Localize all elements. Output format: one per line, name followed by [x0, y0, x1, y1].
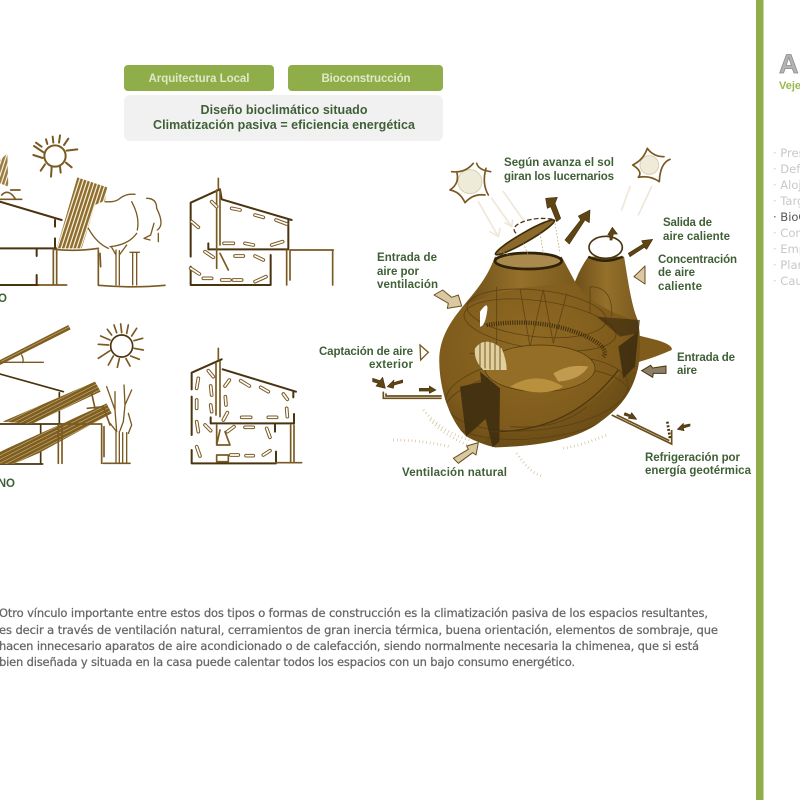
label: ventilation intake: ventilación — [377, 279, 438, 291]
rotating skylight lid — [493, 216, 562, 269]
right cone — [575, 257, 638, 322]
right cupola — [588, 236, 623, 261]
dome body — [439, 257, 640, 447]
icon: summer sun — [33, 135, 77, 177]
spiral stair — [487, 323, 605, 357]
button: Bioconstrucción — [288, 65, 443, 91]
label: ventilation intake: Entrada de — [377, 252, 437, 264]
intake pipe with arrows — [373, 377, 442, 398]
geothermal pipe with arrows — [612, 413, 690, 444]
arrow: natural ventilation — [453, 443, 478, 463]
label: air inlet: aire — [677, 365, 697, 377]
marker: hot air concentration — [634, 266, 645, 284]
structural rings — [445, 286, 630, 440]
sun ray arrows — [478, 187, 652, 237]
label: hot air concentration: Concentración — [658, 254, 737, 266]
sidebar logo — [779, 49, 800, 92]
arrow: air inlet — [642, 365, 666, 377]
heading panel — [124, 95, 443, 141]
label: outside air — [319, 346, 414, 371]
outer base ring — [490, 370, 618, 432]
label: air inlet: Entrada de — [677, 352, 735, 364]
label: skylights: giran los lucernarios — [504, 171, 614, 183]
label: skylights — [504, 157, 614, 183]
label: hot air concentration: de aire — [658, 267, 695, 279]
heading panel: Climatización pasiva = eficiencia energética — [153, 118, 416, 132]
label: geothermal cooling — [645, 452, 752, 477]
sketch: winter airflow section — [192, 348, 302, 463]
dome shadow — [630, 333, 672, 367]
button: Arquitectura Local — [124, 65, 274, 91]
button: Bioconstrucción: Bioconstrucción — [322, 73, 410, 85]
interior window highlights — [475, 305, 588, 382]
marker: outside air intake — [420, 345, 428, 360]
bioclimatic dome diagram — [373, 148, 690, 477]
label: air inlet — [677, 352, 735, 377]
ground speckle — [393, 410, 607, 477]
label: hot air concentration: caliente — [658, 281, 702, 293]
label: outside air: exterior — [369, 359, 414, 371]
sidebar menu — [773, 146, 800, 288]
label: geothermal cooling: Refrigeración por — [645, 452, 741, 464]
arrows: hot air exit — [546, 197, 653, 257]
icon: right sun — [633, 148, 670, 182]
label: hot air exit: aire caliente — [663, 231, 730, 243]
sketch: summer airflow section — [191, 178, 333, 285]
heading panel: Diseño bioclimático situado — [200, 103, 368, 117]
body paragraph: hacen innecesario aparatos de aire acondicionado o de calefacción, siendo normalmente necesaria la chimenea, que si está — [0, 639, 699, 653]
body paragraph: Otro vínculo importante entre estos dos tipos o formas de construcción es la climatización pasiva de los espacios resultantes, — [0, 606, 708, 620]
body paragraph: bien diseñada y situada en la casa puede calentar todos los espacios con un bajo consumo energético. — [0, 655, 575, 669]
sidebar accent bar — [756, 0, 764, 800]
label: hot air exit: Salida de — [663, 217, 712, 229]
label: natural ventilation: Ventilación natural — [402, 467, 507, 479]
label: hot air concentration — [658, 254, 737, 293]
label: ventilation intake: aire por — [377, 266, 420, 278]
body paragraph: es decir a través de ventilación natural, cerramientos de gran inercia térmica, buena orientación, elementos de sombraje, que — [0, 623, 718, 637]
left cone — [466, 268, 546, 304]
arrow: air intake by ventilation — [434, 290, 462, 308]
button: Arquitectura Local: Arquitectura Local — [148, 73, 250, 85]
lower dome shading — [483, 372, 637, 448]
label: ventilation intake — [377, 252, 438, 291]
sketch: summer section — [0, 135, 165, 287]
icon: winter sun — [98, 324, 143, 367]
interior floor — [485, 345, 595, 392]
sketch: winter section — [0, 324, 143, 464]
body paragraph — [0, 606, 718, 669]
icon: left sun — [450, 163, 491, 203]
label: hot air exit — [663, 217, 730, 243]
label: outside air: Captación de aire — [319, 346, 413, 358]
dark entrance panels — [460, 317, 640, 447]
label: skylights: Según avanza el sol — [504, 157, 614, 169]
label: geothermal cooling: energía geotérmica — [645, 465, 752, 477]
